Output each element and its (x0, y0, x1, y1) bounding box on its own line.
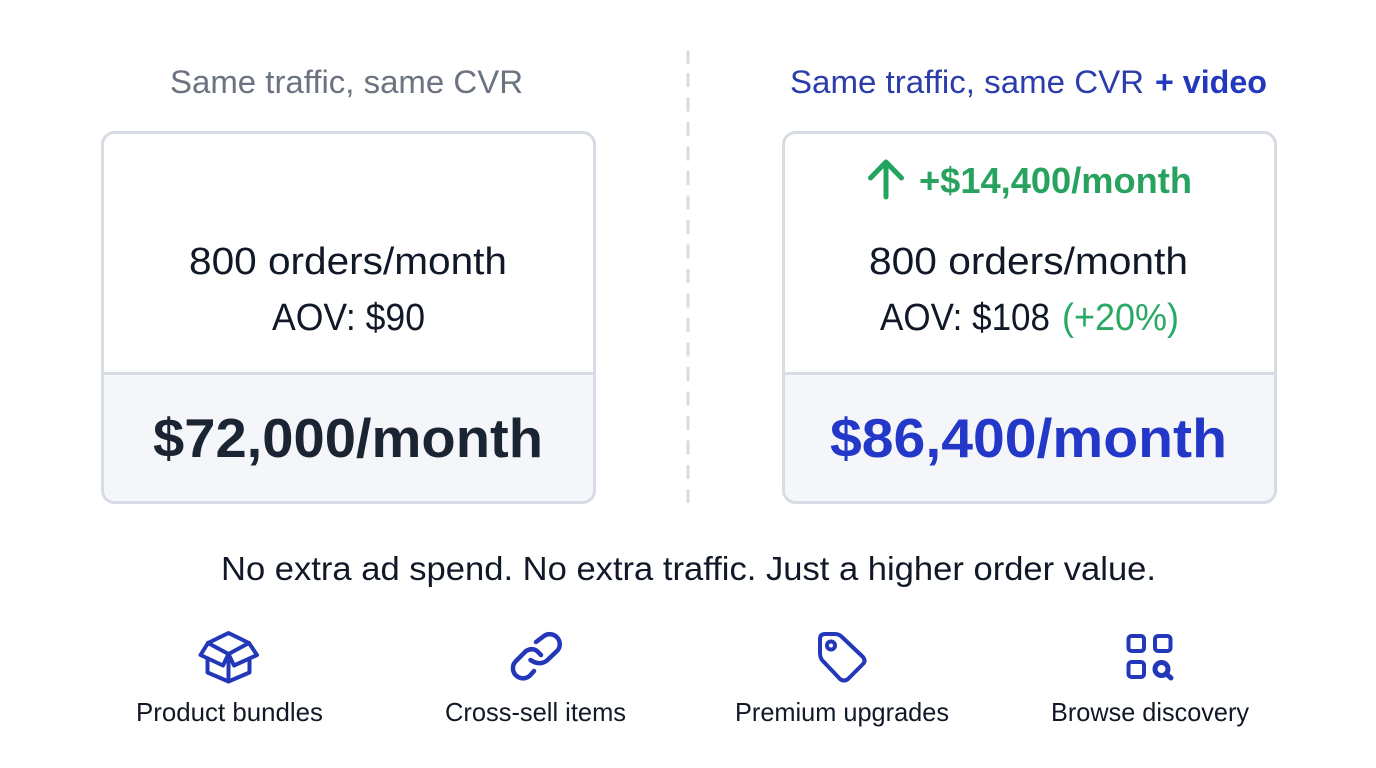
AOV text: AOV: $108 (880, 297, 1050, 339)
AOV uplift: (+20%) (1062, 297, 1179, 339)
takeaway text: No extra ad spend. No extra traffic. Just a higher order value. (221, 550, 1156, 587)
label: Premium upgrades (735, 697, 949, 727)
AOV text: AOV: $90 (272, 297, 425, 339)
heading accent: plus video: + video (1155, 64, 1267, 100)
feature: premium upgrades (735, 634, 949, 727)
panel: baseline scenario (102, 64, 594, 502)
revenue total: $86,400/month (830, 407, 1227, 469)
card: with video (784, 132, 1276, 502)
label: Product bundles (136, 697, 323, 727)
orders text: 800 orders/month (869, 241, 1188, 283)
card: baseline (102, 132, 594, 502)
feature: product bundles (136, 633, 323, 727)
heading: baseline: Same traffic, same CVR (170, 64, 523, 100)
feature: cross-sell items (445, 634, 626, 727)
orders text: 800 orders/month (189, 241, 507, 283)
icon: open box (200, 633, 257, 682)
revenue total: $72,000/month (153, 407, 543, 469)
label: Cross-sell items (445, 697, 626, 727)
heading: with video: Same traffic, same CVR (790, 64, 1144, 100)
icon: grid with search (1128, 636, 1171, 678)
icon: up arrow (870, 162, 902, 197)
feature: browse discovery (1051, 636, 1249, 727)
label: Browse discovery (1051, 697, 1249, 727)
panel: video scenario (784, 64, 1276, 502)
icon: price tag (820, 634, 864, 680)
icon: chain link (513, 634, 560, 678)
uplift value: +$14,400/month (919, 160, 1192, 201)
